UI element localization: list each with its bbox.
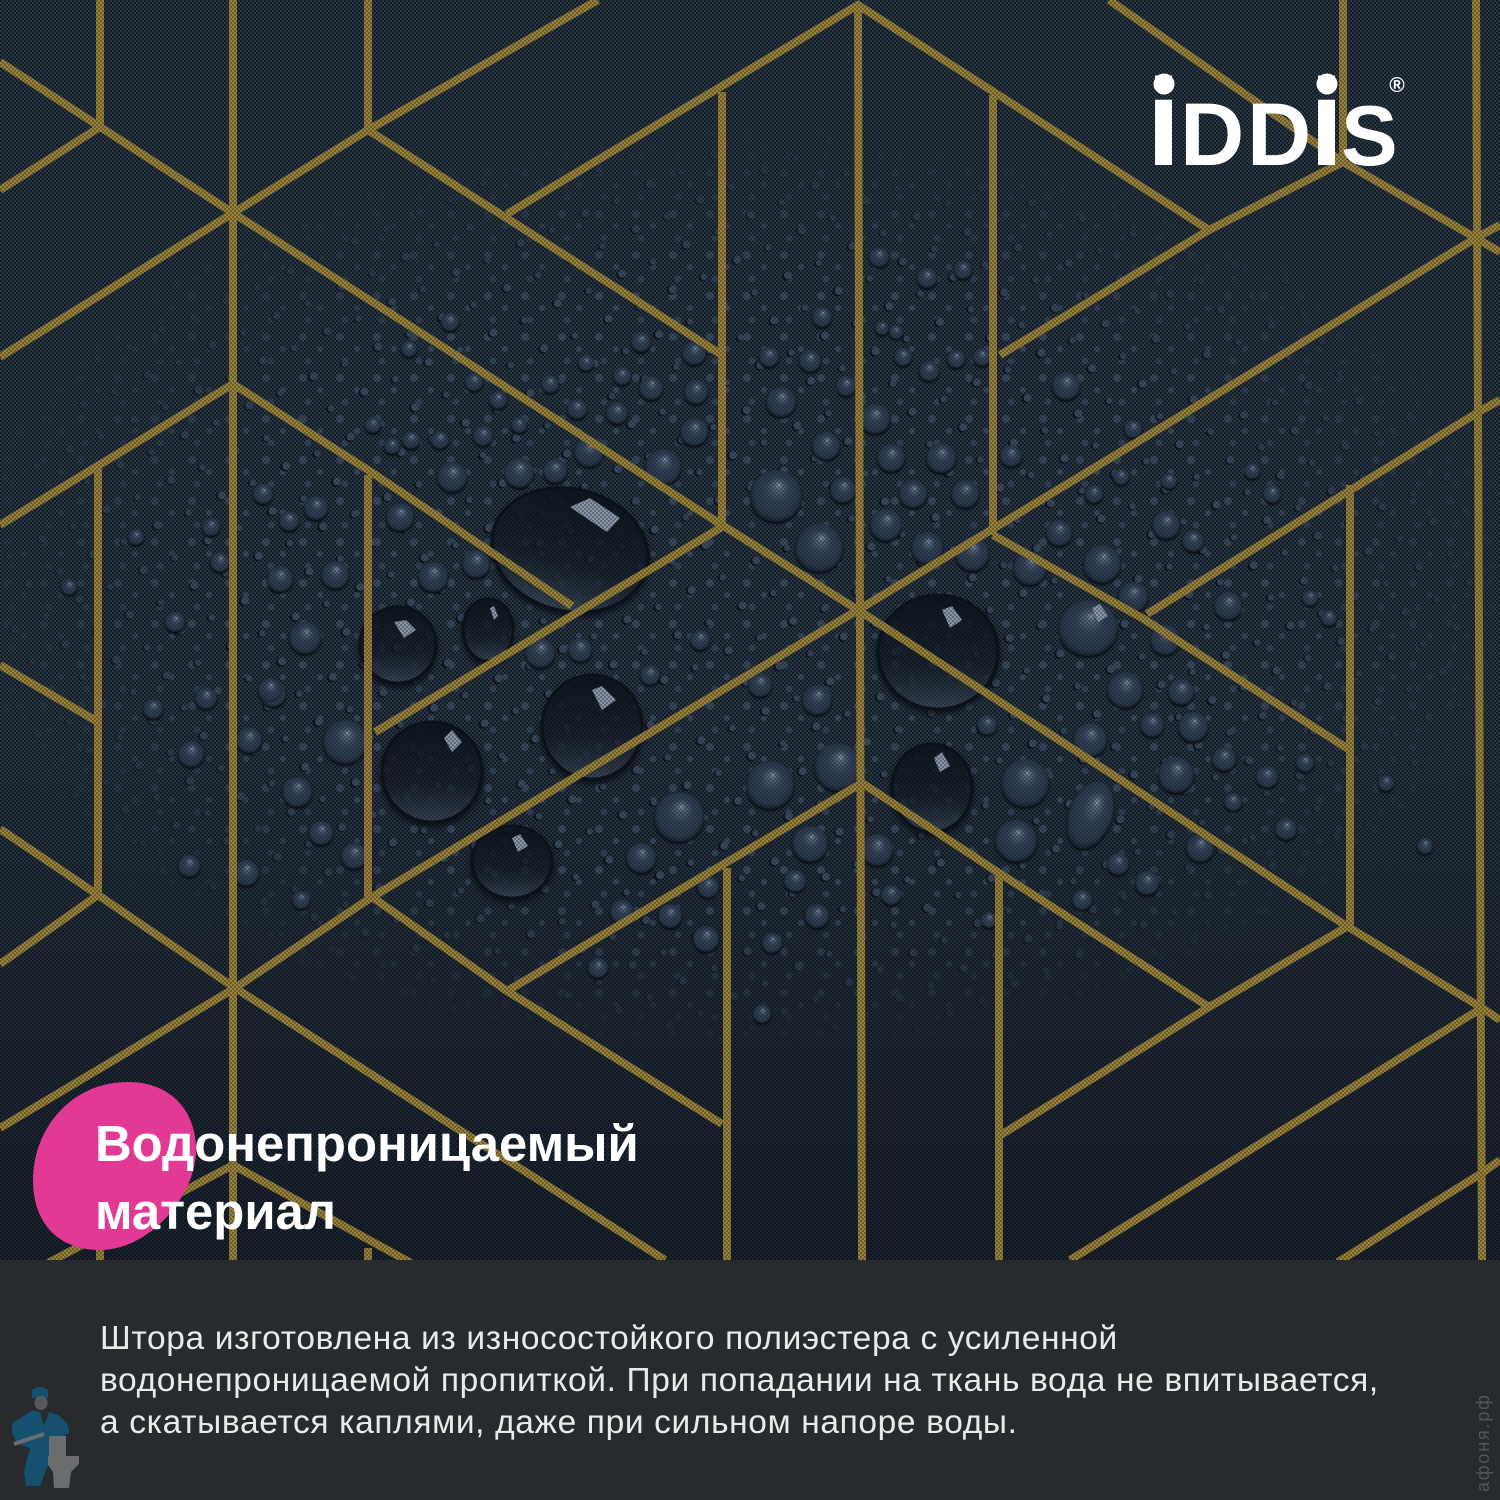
- watermark: афоня.рф: [1473, 1393, 1493, 1492]
- logo: iDDiS: D: [1247, 84, 1311, 184]
- pink blob accent: [33, 1082, 196, 1250]
- bottom description panel: [0, 1260, 1500, 1500]
- heading: Водонепроницаемый: [95, 1115, 639, 1172]
- drop highlights: [394, 498, 1108, 852]
- logo: iDDiS: i: [1310, 55, 1344, 192]
- heading: [95, 1115, 639, 1240]
- logo: iDDiS: [1146, 55, 1405, 192]
- description text: [100, 1320, 1379, 1441]
- logo: iDDiS: D: [1180, 84, 1244, 184]
- description text: а скатывается каплями, даже при сильном напоре воды.: [100, 1404, 1018, 1441]
- tiny droplet field: [4, 152, 1485, 1025]
- description text: водонепроницаемой пропиткой. При попадании на ткань вода не впитывается,: [100, 1362, 1379, 1399]
- heading: материал: [95, 1183, 336, 1240]
- large water drops: [360, 472, 998, 898]
- description text: Штора изготовлена из износостойкого полиэстера с усиленной: [100, 1320, 1118, 1356]
- logo: iDDiS: i: [1146, 55, 1181, 192]
- logo: iDDiS: S: [1341, 89, 1398, 184]
- mascot: plumber with toilet: [12, 1387, 79, 1488]
- logo: iDDiS: ®: [1389, 74, 1405, 97]
- medium water droplets: [61, 247, 1433, 1023]
